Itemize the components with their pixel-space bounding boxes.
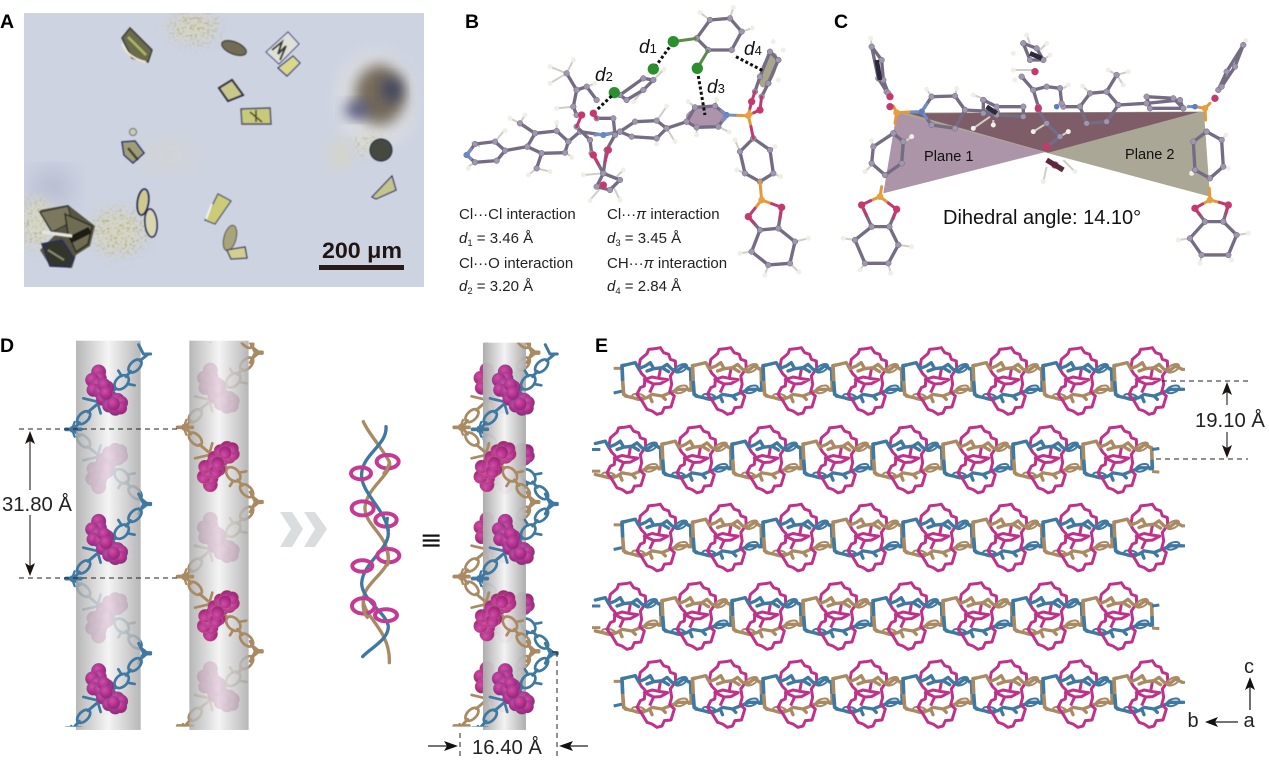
molecule B: [467, 7, 808, 275]
panel E: crystal packing: [592, 335, 1265, 732]
carbon skeleton: [467, 18, 795, 265]
scale bar: 200 μm: [322, 238, 402, 263]
width dimension 16.40 Å: [428, 652, 588, 760]
simplified double helix with rings: [351, 422, 399, 663]
interaction legend: = 3.20 Å: [473, 278, 533, 295]
dotted interaction lines: [596, 47, 763, 115]
heteroatom bonds: [467, 92, 782, 223]
pitch dimension 31.80 Å: [2, 429, 178, 578]
interaction legend: [459, 206, 727, 297]
crystal axes: [1187, 656, 1255, 732]
cylinder 2: [189, 341, 249, 730]
interaction legend: = 2.84 Å: [621, 278, 681, 295]
front helix strands: [66, 271, 262, 735]
width dimension 16.40 Å: 16.40 Å: [472, 736, 542, 759]
interaction legend: d: [459, 230, 468, 247]
panel A: microscope photo of crystals: [0, 0, 424, 287]
label E: E: [595, 335, 608, 357]
interaction legend: 3: [615, 238, 621, 249]
interaction legend: 4: [615, 286, 621, 297]
interaction legend: Cl···Cl interaction: [459, 206, 576, 223]
interaction legend: = 3.46 Å: [473, 230, 533, 247]
label A: A: [0, 11, 14, 33]
interaction legend: CH···π interaction: [607, 255, 727, 272]
equivalence sign: ≡: [420, 525, 442, 556]
row 4 of macrocycle chains: [592, 583, 1159, 649]
crystal axes: a: [1243, 710, 1255, 732]
interaction legend: Cl···O interaction: [459, 255, 573, 272]
row 2 of macrocycle chains: [592, 426, 1159, 493]
column 3 combined helices: [454, 271, 557, 735]
row 1 of macrocycle chains: [614, 348, 1185, 414]
pitch dimension 31.80 Å: 31.80 Å: [2, 493, 72, 516]
panel D: helical packing: [1, 338, 588, 756]
chevron arrows: [280, 512, 327, 547]
distance labels: d4: [744, 39, 762, 60]
dihedral angle text: Dihedral angle: 14.10°: [943, 207, 1141, 229]
distance labels: d3: [707, 77, 725, 98]
label B: B: [465, 11, 479, 33]
label D: D: [0, 335, 14, 357]
panel C: dihedral angle between planes: [834, 11, 1248, 273]
interaction legend: 2: [467, 286, 473, 297]
distance labels: [595, 37, 762, 98]
interaction legend: d: [459, 278, 468, 295]
hydrogen atoms: [468, 7, 808, 275]
crystal axes: c: [1244, 656, 1254, 678]
crystal axes: b: [1187, 710, 1199, 732]
interaction legend: 1: [467, 238, 473, 249]
row 5 of macrocycle chains: [614, 661, 1185, 727]
plane 1 label: Plane 1: [924, 149, 974, 165]
interaction legend: = 3.45 Å: [621, 230, 681, 247]
layer spacing dimension 19.10 Å: 19.10 Å: [1195, 409, 1265, 432]
back layers: [66, 343, 262, 733]
cylinder 3: [483, 343, 526, 730]
plane 2 label: Plane 2: [1125, 147, 1174, 163]
interaction legend: Cl···π interaction: [607, 206, 720, 223]
photo background with crystals: [0, 0, 424, 287]
distance labels: d1: [639, 37, 657, 58]
panel B: intermolecular interactions: [459, 7, 808, 297]
distance labels: d2: [595, 65, 613, 86]
row 3 of macrocycle chains: [614, 504, 1185, 571]
scale bar: [319, 238, 404, 270]
label C: C: [834, 11, 848, 33]
interaction legend: d: [607, 278, 616, 295]
layer spacing dimension 19.10 Å: [1156, 381, 1265, 459]
column 1 and column 2 helices on cylinders: [66, 271, 262, 735]
cylinder 1: [76, 341, 141, 730]
atoms: N, P, O, Cl: [467, 38, 782, 217]
interaction legend: d: [607, 230, 616, 247]
molecule and planes C: [843, 35, 1248, 273]
